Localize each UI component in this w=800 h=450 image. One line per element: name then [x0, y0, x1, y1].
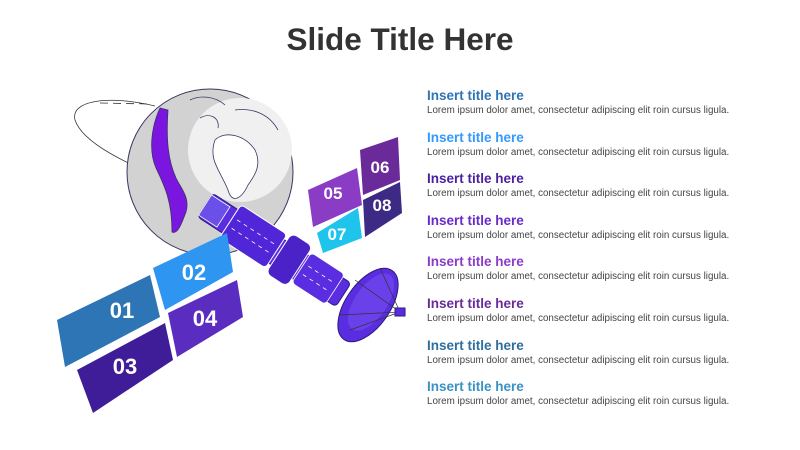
- item 6: Lorem ipsum dolor amet, consectetur adipiscing elit roin cursus ligula.: [427, 313, 729, 324]
- item 3: Lorem ipsum dolor amet, consectetur adipiscing elit roin cursus ligula.: [427, 188, 729, 199]
- panel 08: [363, 182, 402, 237]
- item 5: Lorem ipsum dolor amet, consectetur adipiscing elit roin cursus ligula.: [427, 271, 729, 282]
- panel 02: 02: [182, 260, 206, 285]
- panel 06: [360, 137, 400, 195]
- item 8: [427, 379, 729, 407]
- panel 04: 04: [193, 306, 218, 331]
- item 7: Insert title here: [427, 338, 524, 353]
- panel 07: 07: [328, 225, 346, 244]
- panel 02: [153, 233, 233, 310]
- panel 05: [308, 168, 362, 227]
- orbit line: [75, 100, 230, 200]
- item 6: [427, 296, 729, 324]
- panel 08: 08: [373, 196, 391, 215]
- dish: [326, 258, 410, 352]
- item 1: Insert title here: [427, 88, 524, 103]
- item 7: Lorem ipsum dolor amet, consectetur adipiscing elit roin cursus ligula.: [427, 355, 729, 366]
- globe: [127, 89, 293, 255]
- title: Slide Title Here: [286, 21, 514, 57]
- panel 04: [168, 280, 243, 357]
- panel 01: [57, 275, 160, 367]
- item 1: [427, 88, 729, 116]
- item 8: Insert title here: [427, 379, 524, 394]
- item 7: [427, 338, 729, 366]
- item 6: Insert title here: [427, 296, 524, 311]
- panel 01: 01: [110, 298, 134, 323]
- item 2: Lorem ipsum dolor amet, consectetur adipiscing elit roin cursus ligula.: [427, 147, 729, 158]
- item 2: Insert title here: [427, 130, 524, 145]
- panel 06: 06: [371, 158, 389, 177]
- item 3: [427, 171, 729, 199]
- text list: [427, 88, 729, 407]
- panel 05: 05: [324, 184, 342, 203]
- item 2: [427, 130, 729, 158]
- panel 03: [77, 323, 173, 413]
- panel 07: [317, 208, 362, 253]
- panel 03: 03: [113, 354, 137, 379]
- item 1: Lorem ipsum dolor amet, consectetur adipiscing elit roin cursus ligula.: [427, 105, 729, 116]
- satellite body: [192, 185, 356, 315]
- item 5: Insert title here: [427, 254, 524, 269]
- item 8: Lorem ipsum dolor amet, consectetur adipiscing elit roin cursus ligula.: [427, 396, 729, 407]
- illustration: satellite and globe: [57, 88, 406, 413]
- item 4: [427, 213, 729, 241]
- item 3: Insert title here: [427, 171, 524, 186]
- item 5: [427, 254, 729, 282]
- item 4: Insert title here: [427, 213, 524, 228]
- item 4: Lorem ipsum dolor amet, consectetur adipiscing elit roin cursus ligula.: [427, 230, 729, 241]
